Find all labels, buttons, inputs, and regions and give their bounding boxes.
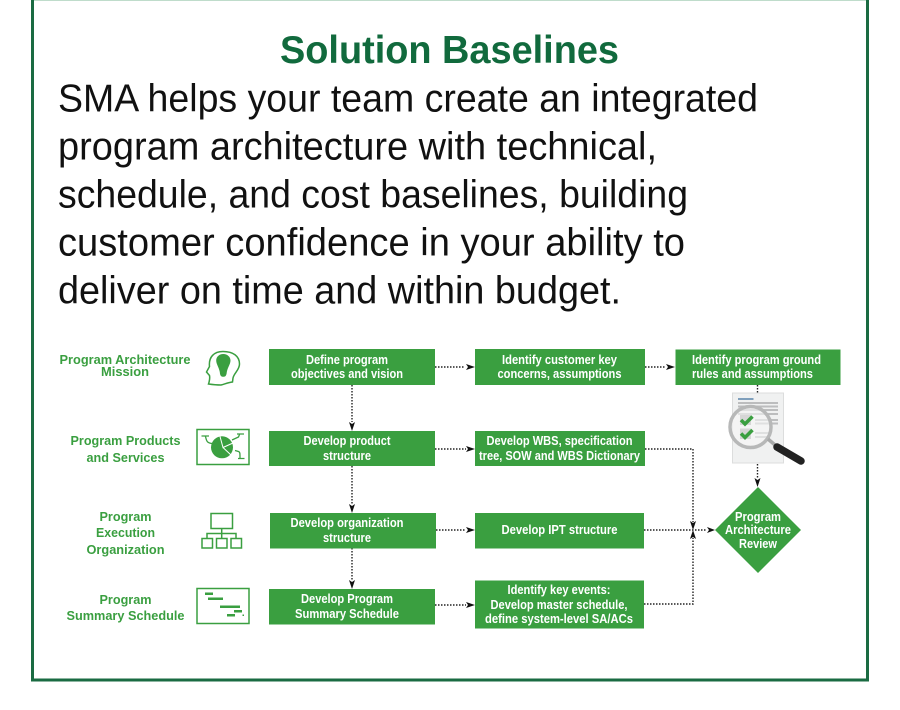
- diamond: Program Architecture Review: Architecture: [725, 523, 791, 537]
- icon: head with light bulb: [206, 352, 240, 385]
- row label: Program Architecture Mission: Program Architecture: [60, 352, 190, 367]
- row label: Program Execution Organization: Execution: [96, 525, 155, 540]
- box: Develop Program Summary Schedule: [269, 589, 435, 624]
- box: Identify key events: Develop master schedule,: [490, 598, 628, 612]
- title: Solution Baselines: [280, 29, 619, 72]
- row label: Program Architecture Mission: [60, 352, 190, 379]
- box: Define program objectives and vision: objectives and vision: [291, 367, 403, 381]
- box: Identify key events: [475, 580, 644, 628]
- intro text block: program architecture with technical,: [58, 126, 657, 168]
- box: Develop Program Summary Schedule: Develop Program: [301, 592, 393, 606]
- box: Identify program ground rules: [676, 350, 840, 385]
- box: Develop organization structure: structure: [323, 531, 371, 545]
- box: Develop WBS: [475, 431, 645, 466]
- box: Identify program ground rules: Identify program ground: [692, 353, 821, 367]
- box: Define program objectives and vision: Define program: [306, 353, 388, 367]
- box: Develop product structure: Develop product: [304, 434, 391, 448]
- icon: organization chart: [202, 514, 242, 548]
- box: Develop WBS: Develop WBS, specification: [486, 434, 632, 448]
- intro text block: schedule, and cost baselines, building: [58, 174, 688, 216]
- box: Develop organization structure: Develop organization: [290, 516, 404, 530]
- row label: Program Architecture Mission: Mission: [101, 364, 149, 379]
- box: Identify customer key concerns: Identify customer key: [502, 353, 617, 367]
- box: Develop IPT structure: Develop IPT structure: [502, 523, 618, 537]
- box: Develop product structure: structure: [323, 449, 371, 463]
- connectors: [349, 364, 760, 608]
- row label: Program Execution Organization: [86, 509, 165, 557]
- box: Develop IPT structure: [475, 513, 644, 548]
- row label: Program Execution Organization: Organization: [86, 542, 165, 557]
- diamond: Program Architecture Review: Review: [739, 537, 777, 551]
- box: Identify customer key concerns: [475, 349, 645, 385]
- box: Identify key events: Identify key events:: [508, 583, 610, 597]
- row label: Program Products and Services: and Services: [86, 450, 164, 465]
- diamond: Program Architecture Review: [715, 487, 801, 573]
- intro text block: deliver on time and within budget.: [58, 270, 621, 312]
- row label: Program Execution Organization: Program: [100, 509, 152, 524]
- box: Identify program ground rules: rules and assumptions: [692, 367, 813, 381]
- box: Identify key events: define system-level SA/ACs: [485, 612, 633, 626]
- arrowheads: [349, 364, 760, 608]
- icon: document with magnifying glass: [730, 393, 801, 463]
- row label: Program Summary Schedule: [66, 592, 184, 623]
- box: Develop Program Summary Schedule: Summary Schedule: [295, 607, 399, 621]
- intro text block: SMA helps your team create an integrated: [58, 78, 758, 120]
- intro text block: customer confidence in your ability to: [58, 222, 685, 264]
- diamond: Program Architecture Review: Program: [735, 510, 781, 524]
- box: Develop product structure: [269, 431, 435, 466]
- row label: Program Summary Schedule: Summary Schedule: [66, 608, 184, 623]
- icon: gantt schedule: [197, 588, 249, 624]
- row label: Program Products and Services: Program Products: [70, 433, 180, 448]
- row label: Program Summary Schedule: Program: [100, 592, 152, 607]
- row label: Program Products and Services: [70, 433, 180, 465]
- icon: pie chart panel: [197, 430, 249, 464]
- intro text block: [58, 78, 758, 312]
- box: Develop organization structure: [270, 513, 436, 548]
- box: Define program objectives and vision: [269, 349, 435, 385]
- box: Develop WBS: tree, SOW and WBS Dictionary: [479, 449, 640, 463]
- box: Identify customer key concerns: concerns, assumptions: [498, 367, 622, 381]
